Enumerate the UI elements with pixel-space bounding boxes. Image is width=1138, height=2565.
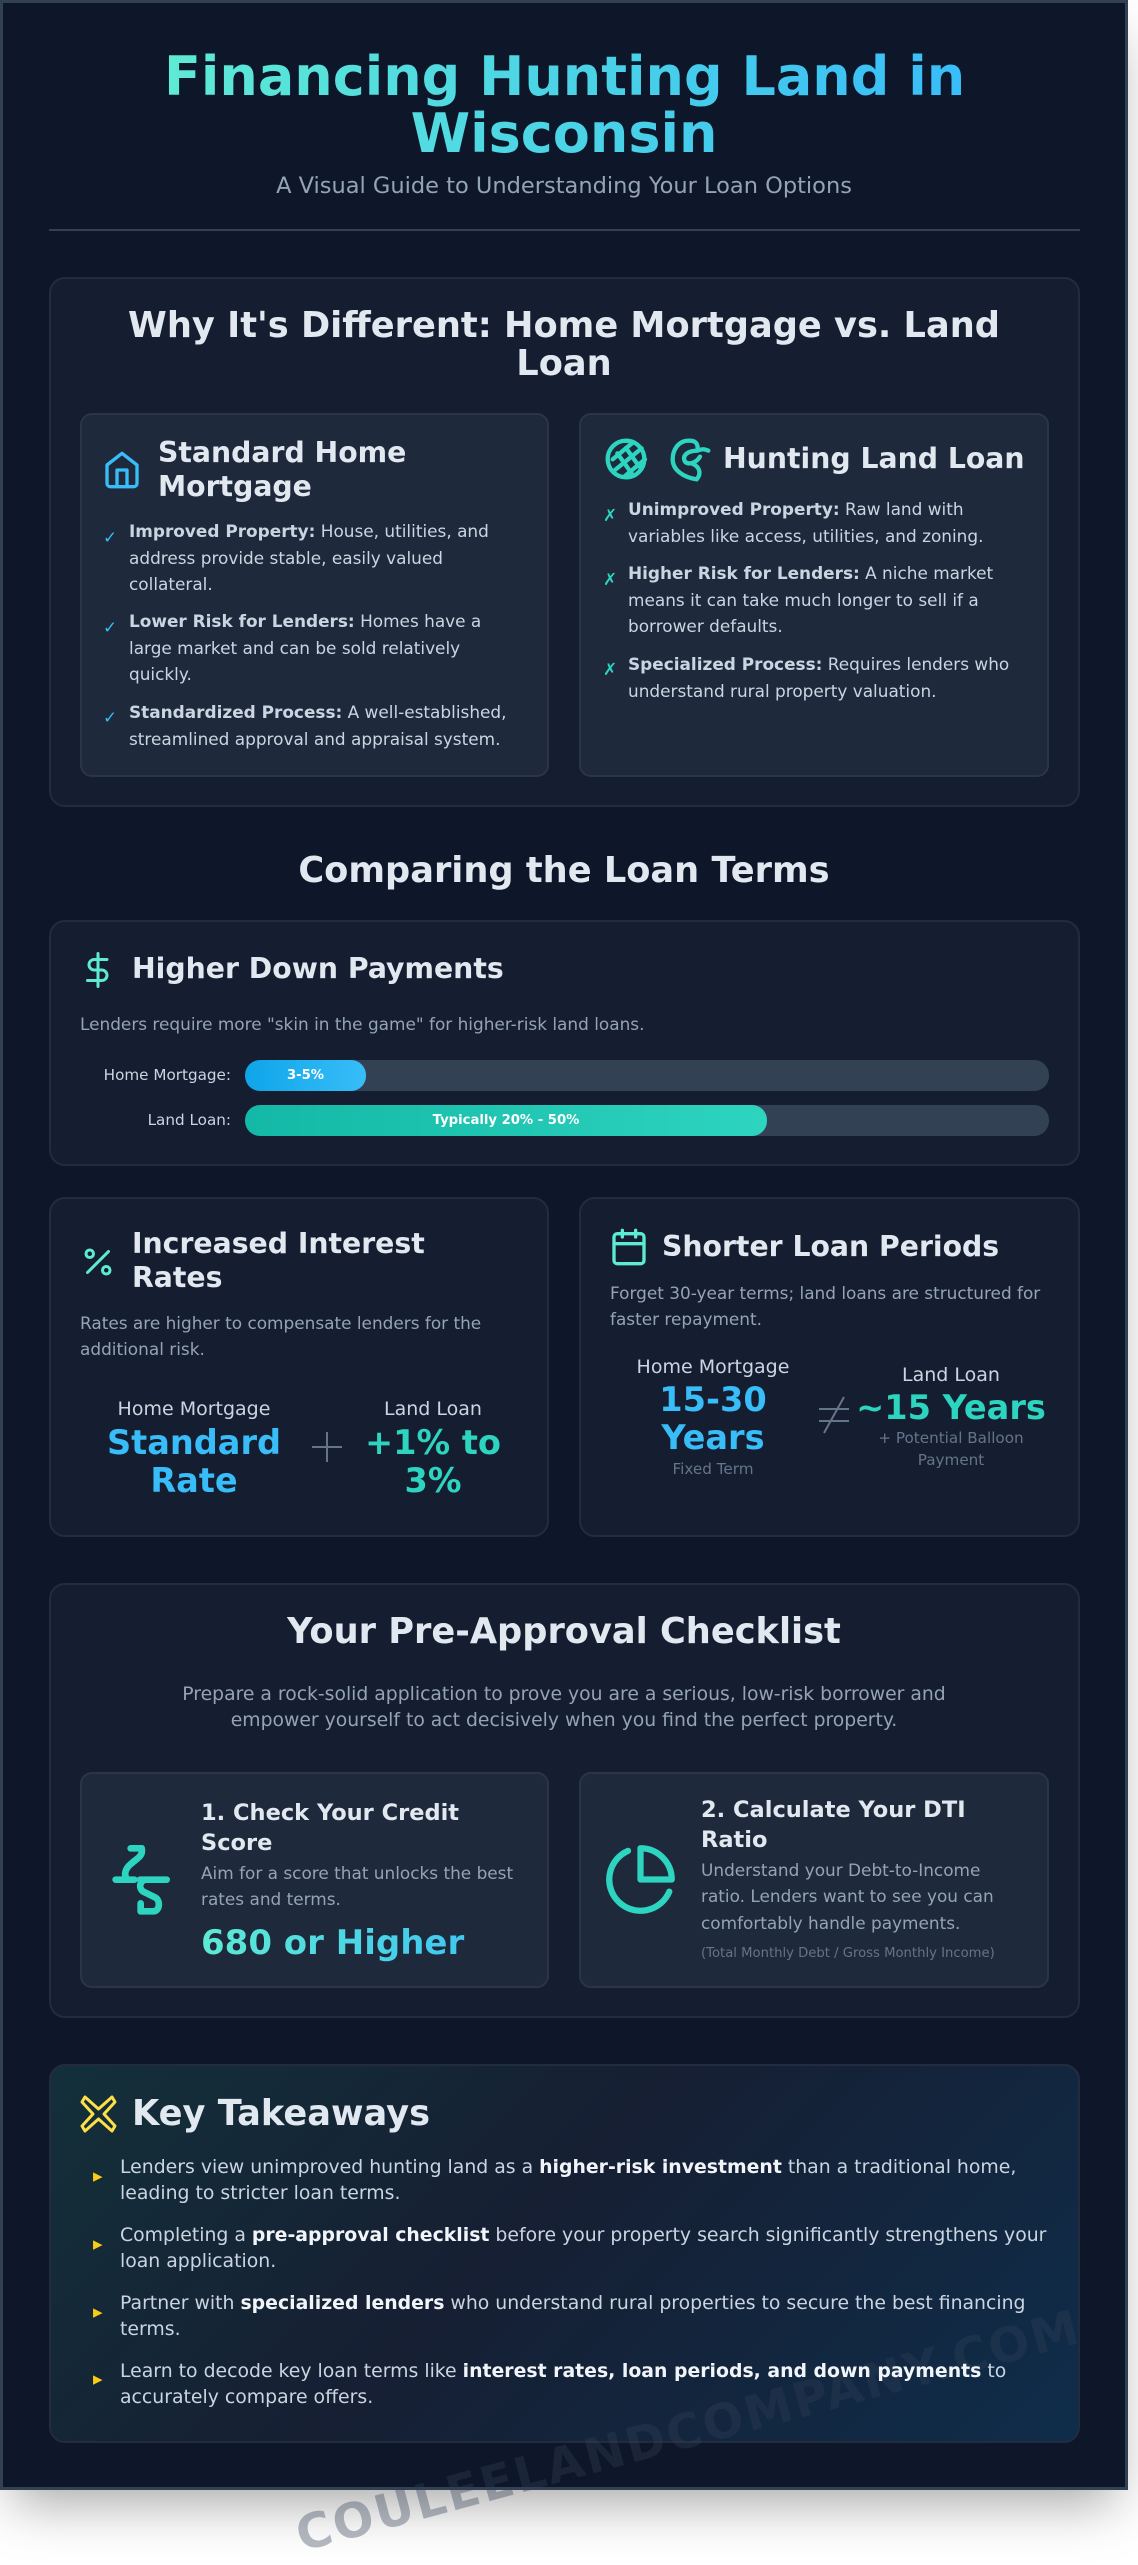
title: Financing Hunting Land in [164, 45, 965, 108]
text: checklist description: empower yourself to act decisively when you find the perfect property. [231, 1710, 897, 1731]
item: specialized process: Specialized Process: Requires lenders who [628, 654, 1009, 674]
description: dti: ratio. Lenders want to see you can [701, 1886, 994, 1906]
symbol: plus [312, 1432, 342, 1462]
panel: check credit score [80, 1772, 549, 1988]
heading: standard home mortgage: Standard Home [158, 436, 406, 469]
bar: land loan [245, 1105, 1049, 1136]
icon: pie chart [606, 1845, 675, 1914]
item: improved property: collateral. [129, 574, 213, 594]
takeaway 1: leading to stricter loan terms. [120, 2183, 400, 2204]
description: credit [201, 1863, 513, 1909]
heading: why it's different: Loan [516, 343, 612, 384]
stat: land loan term: ~15 Years [856, 1388, 1046, 1427]
cross mark 3: ✗ [603, 659, 617, 679]
text: checklist description: Prepare a rock-solid application to prove you are a serious, low-risk borrower and [182, 1684, 946, 1705]
takeaway 4: accurately compare offers. [120, 2387, 373, 2408]
text: loan period description: Forget 30-year terms; land loans are structured for [610, 1283, 1040, 1303]
text: checklist description [182, 1684, 946, 1731]
check marks: ✓ [103, 527, 117, 547]
text block: dti [701, 1797, 995, 1961]
title [164, 48, 964, 162]
heading: why it's different: Why It's Different: Home Mortgage vs. Land [128, 305, 1000, 346]
item: unimproved property: variables like access, utilities, and zoning. [628, 526, 983, 546]
cross list: land loan [603, 499, 1009, 700]
takeaway 1 [120, 2157, 1016, 2204]
heading: standard home mortgage: Mortgage [158, 470, 312, 503]
stat: home mortgage term [637, 1356, 789, 1478]
stat: land loan rate: Land Loan [384, 1398, 482, 1420]
stat: home mortgage rate: Home Mortgage [118, 1398, 270, 1420]
takeaways list [93, 2157, 1046, 2408]
cross mark 2: ✗ [603, 569, 617, 589]
panel: calculate dti ratio [579, 1772, 1049, 1988]
stat: land loan term [856, 1364, 1046, 1469]
text: loan period description [610, 1283, 1040, 1329]
panel: pre-approval checklist [49, 1583, 1080, 2018]
text: interest description: Rates are higher to compensate lenders for the [80, 1313, 481, 1333]
check list: home mortgage [103, 521, 507, 748]
heading: why it's different [128, 305, 1000, 384]
icon: calendar [612, 1228, 646, 1266]
stat: home mortgage term: 15-30 [659, 1380, 767, 1419]
item: higher risk [628, 563, 993, 636]
heading: check your credit score: 1. Check Your Credit [201, 1800, 459, 1826]
symbol: not equal [819, 1396, 849, 1434]
description: dti: Understand your Debt-to-Income [701, 1860, 980, 1880]
check mark 3: ✓ [103, 707, 117, 727]
takeaway 2: loan application. [120, 2251, 276, 2272]
bar: home mortgage [245, 1060, 1049, 1091]
bullet 2: ▸ [93, 2233, 103, 2255]
stat: land loan rate [365, 1398, 501, 1500]
stat: home mortgage rate [107, 1398, 281, 1500]
description: credit: Aim for a score that unlocks the best [201, 1863, 513, 1883]
panel: shorter loan periods [579, 1197, 1080, 1537]
item: higher risk: means it can take much longer to sell if a [628, 590, 979, 610]
item: lower risk: quickly. [129, 664, 192, 684]
takeaway 1: Lenders view unimproved hunting land as a higher-risk investment than a traditional home, [120, 2157, 1016, 2178]
bullet 1: ▸ [93, 2165, 103, 2187]
description: dti [701, 1860, 994, 1933]
takeaway 2: Completing a pre-approval checklist before your property search significantly strengthens your [120, 2225, 1046, 2246]
cross marks: ✗ [603, 505, 617, 525]
item: unimproved property: Unimproved Property: Raw land with [628, 499, 964, 519]
takeaway 3: Partner with specialized lenders who understand rural properties to secure the best financing [120, 2293, 1026, 2314]
icon: percent [84, 1248, 112, 1276]
heading: higher down payments: Higher Down Payments [132, 952, 504, 985]
watermark: COULEELANDCOMPANY.COM [290, 2299, 1087, 2563]
heading: standard home mortgage [158, 436, 406, 503]
takeaway 4 [120, 2361, 1006, 2408]
heading: comparing the loan terms: Comparing the Loan Terms [298, 850, 830, 891]
heading: calculate your dti ratio [701, 1797, 966, 1853]
heading: hunting land loan: Hunting Land Loan [723, 442, 1025, 475]
takeaway 3: terms. [120, 2319, 181, 2340]
stat: home mortgage term: Years [661, 1418, 765, 1457]
stat: home mortgage term: Home Mortgage [637, 1356, 789, 1378]
stat: land loan rate: +1% to [365, 1423, 501, 1462]
item: improved property [129, 521, 489, 594]
label: home mortgage: Home Mortgage: [104, 1066, 231, 1084]
text: interest description [80, 1313, 481, 1359]
subtitle: A Visual Guide to Understanding Your Loan Options [276, 173, 852, 199]
item: higher risk: borrower defaults. [628, 616, 783, 636]
stat: home mortgage rate: Rate [150, 1461, 238, 1500]
heading: increased interest rates: Rates [132, 1261, 222, 1294]
stat: land loan term: Payment [918, 1451, 984, 1469]
stat: home mortgage term: Fixed Term [672, 1460, 754, 1478]
panel: hunting land loan [579, 413, 1049, 777]
item: improved property: address provide stable, easily valued [129, 548, 443, 568]
label: land loan: Land Loan: [148, 1111, 231, 1129]
divider [49, 229, 1080, 231]
panel: key takeaways [49, 2064, 1080, 2443]
heading: calculate your dti ratio: Ratio [701, 1827, 767, 1853]
icon: credit squiggle [112, 1845, 170, 1915]
heading: key takeaways: Key Takeaways [132, 2093, 430, 2134]
heading: increased interest rates [132, 1227, 425, 1294]
item: specialized process: understand rural property valuation. [628, 680, 937, 700]
item: specialized process [628, 654, 1009, 700]
text: down payment description: Lenders require more "skin in the game" for higher-risk land loans. [80, 1014, 644, 1034]
title: Wisconsin [411, 102, 717, 165]
item: lower risk: large market and can be sold relatively [129, 638, 460, 658]
icon: hatched circle and hook [606, 438, 710, 482]
stat: land loan term: Land Loan [902, 1364, 1000, 1386]
item: lower risk: Lower Risk for Lenders: Homes have a [129, 611, 481, 631]
value: 680 or higher: 680 or Higher [201, 1923, 464, 1963]
bullet 4: ▸ [93, 2368, 103, 2390]
icon: yellow x [80, 2095, 116, 2133]
panel: standard home mortgage [80, 413, 549, 777]
text: loan period description: faster repayment. [610, 1309, 762, 1329]
item: standardized process [129, 702, 507, 748]
icon: dollar [86, 952, 108, 988]
item: standardized process: streamlined approval and appraisal system. [129, 728, 500, 748]
panel: why it's different [49, 277, 1080, 807]
item: higher risk: Higher Risk for Lenders: A niche market [628, 563, 993, 583]
panel: increased interest rates [49, 1197, 549, 1537]
stat: land loan rate: 3% [404, 1461, 462, 1500]
check mark 2: ✓ [103, 617, 117, 637]
description: credit: rates and terms. [201, 1889, 341, 1909]
bullet 3: ▸ [93, 2301, 103, 2323]
heading: check your credit score: Score [201, 1830, 272, 1856]
panel: higher down payments [49, 920, 1080, 1166]
heading: shorter loan periods: Shorter Loan Periods [662, 1230, 999, 1263]
heading: calculate your dti ratio: 2. Calculate Your DTI [701, 1797, 966, 1823]
takeaway 3 [120, 2293, 1026, 2340]
text: interest description: additional risk. [80, 1339, 205, 1359]
text block: credit score [201, 1800, 513, 1963]
takeaway 2 [120, 2225, 1046, 2272]
bar: home mortgage: 3-5% [287, 1068, 324, 1083]
description: dti: comfortably handle payments. [701, 1913, 960, 1933]
note: dti formula: (Total Monthly Debt / Gross Monthly Income) [701, 1946, 995, 1961]
takeaway 4: Learn to decode key loan terms like interest rates, loan periods, and down payments to [120, 2361, 1006, 2382]
item: unimproved property [628, 499, 983, 546]
heading: check your credit score [201, 1800, 459, 1856]
heading: increased interest rates: Increased Interest [132, 1227, 425, 1260]
bar: land loan: Typically 20% - 50% [433, 1113, 579, 1128]
icon: home [105, 452, 139, 488]
item: improved property: Improved Property: House, utilities, and [129, 521, 489, 541]
stat: home mortgage rate: Standard [107, 1423, 281, 1462]
stat: land loan term: + Potential Balloon [878, 1429, 1024, 1447]
item: standardized process: Standardized Process: A well-established, [129, 702, 507, 722]
item: lower risk [129, 611, 481, 684]
heading: pre-approval checklist: Your Pre-Approval Checklist [287, 1611, 841, 1652]
